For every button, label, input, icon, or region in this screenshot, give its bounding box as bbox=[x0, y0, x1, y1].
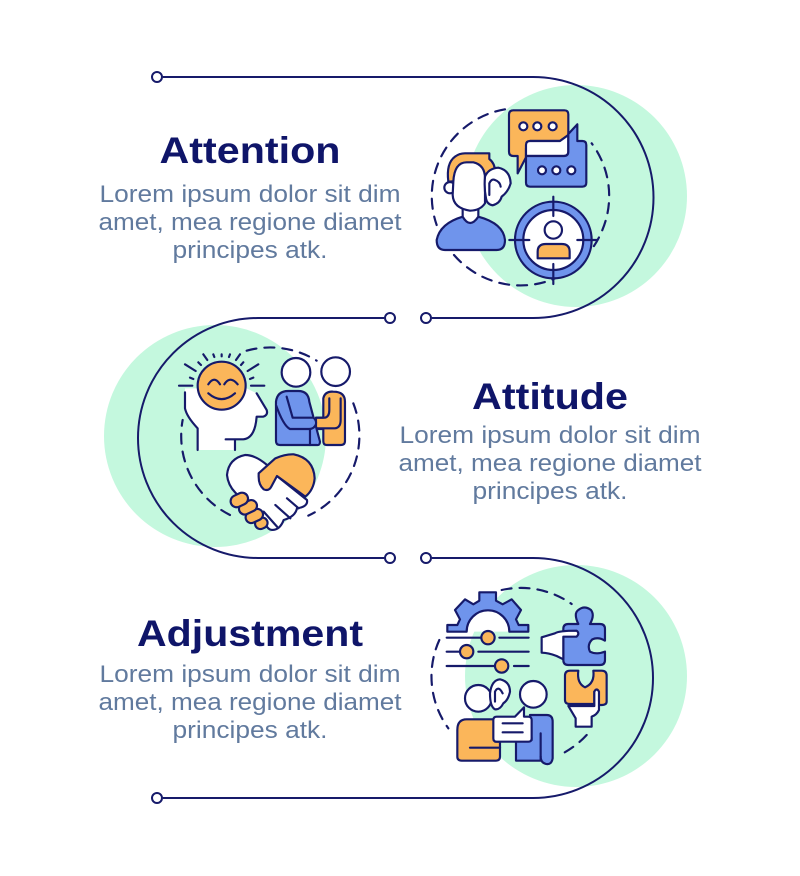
icon: sliders bbox=[447, 631, 529, 673]
text block: Lorem ipsum dolor sit dim bbox=[400, 422, 700, 449]
panel: attitude bbox=[104, 313, 702, 563]
endpoint marker bbox=[421, 553, 431, 563]
heading: Attitude bbox=[472, 376, 628, 417]
heading: Adjustment bbox=[137, 613, 363, 654]
icon: orange puzzle piece and hand bbox=[565, 671, 607, 727]
text block: Lorem ipsum dolor sit dim bbox=[100, 661, 400, 688]
dashed ring bbox=[431, 588, 587, 754]
text block bbox=[98, 181, 402, 264]
panel: adjustment bbox=[98, 553, 687, 803]
icon: attitude illustration bbox=[179, 347, 359, 531]
text block: Lorem ipsum dolor sit dim bbox=[100, 181, 400, 208]
text block: principes atk. bbox=[172, 717, 328, 744]
green circle background bbox=[465, 85, 687, 307]
connector line bbox=[163, 77, 654, 318]
text block: principes atk. bbox=[472, 478, 628, 505]
endpoint marker bbox=[385, 313, 395, 323]
icon: attention illustration bbox=[432, 109, 609, 285]
icon: speech bubbles bbox=[509, 110, 586, 187]
icon: gear bbox=[447, 592, 528, 632]
heading: Attention bbox=[160, 130, 340, 171]
icon: head with smiling sun bbox=[179, 354, 267, 450]
text block: principes atk. bbox=[172, 237, 328, 264]
dashed ring bbox=[432, 109, 609, 285]
icon: blue puzzle piece and hand bbox=[542, 607, 605, 665]
text block: amet, mea regione diamet bbox=[398, 450, 702, 477]
icon: adjustment illustration bbox=[431, 588, 607, 764]
green circle background bbox=[104, 325, 326, 547]
connector line bbox=[163, 558, 653, 798]
icon: listening person bbox=[437, 153, 511, 250]
icon: handshake heart bbox=[227, 454, 315, 531]
endpoint marker bbox=[152, 793, 162, 803]
endpoint marker bbox=[421, 313, 431, 323]
icon: two people talking bbox=[457, 679, 553, 764]
icon: target on person bbox=[509, 197, 597, 284]
text block bbox=[398, 422, 702, 505]
text block: amet, mea regione diamet bbox=[98, 209, 402, 236]
icon: two people greeting bbox=[276, 357, 350, 445]
text block: amet, mea regione diamet bbox=[98, 689, 402, 716]
endpoint marker bbox=[152, 72, 162, 82]
green circle background bbox=[465, 565, 687, 787]
panel: attention bbox=[98, 72, 687, 323]
dashed ring bbox=[181, 347, 359, 516]
connector line bbox=[138, 318, 384, 558]
text block bbox=[98, 661, 402, 744]
endpoint marker bbox=[385, 553, 395, 563]
